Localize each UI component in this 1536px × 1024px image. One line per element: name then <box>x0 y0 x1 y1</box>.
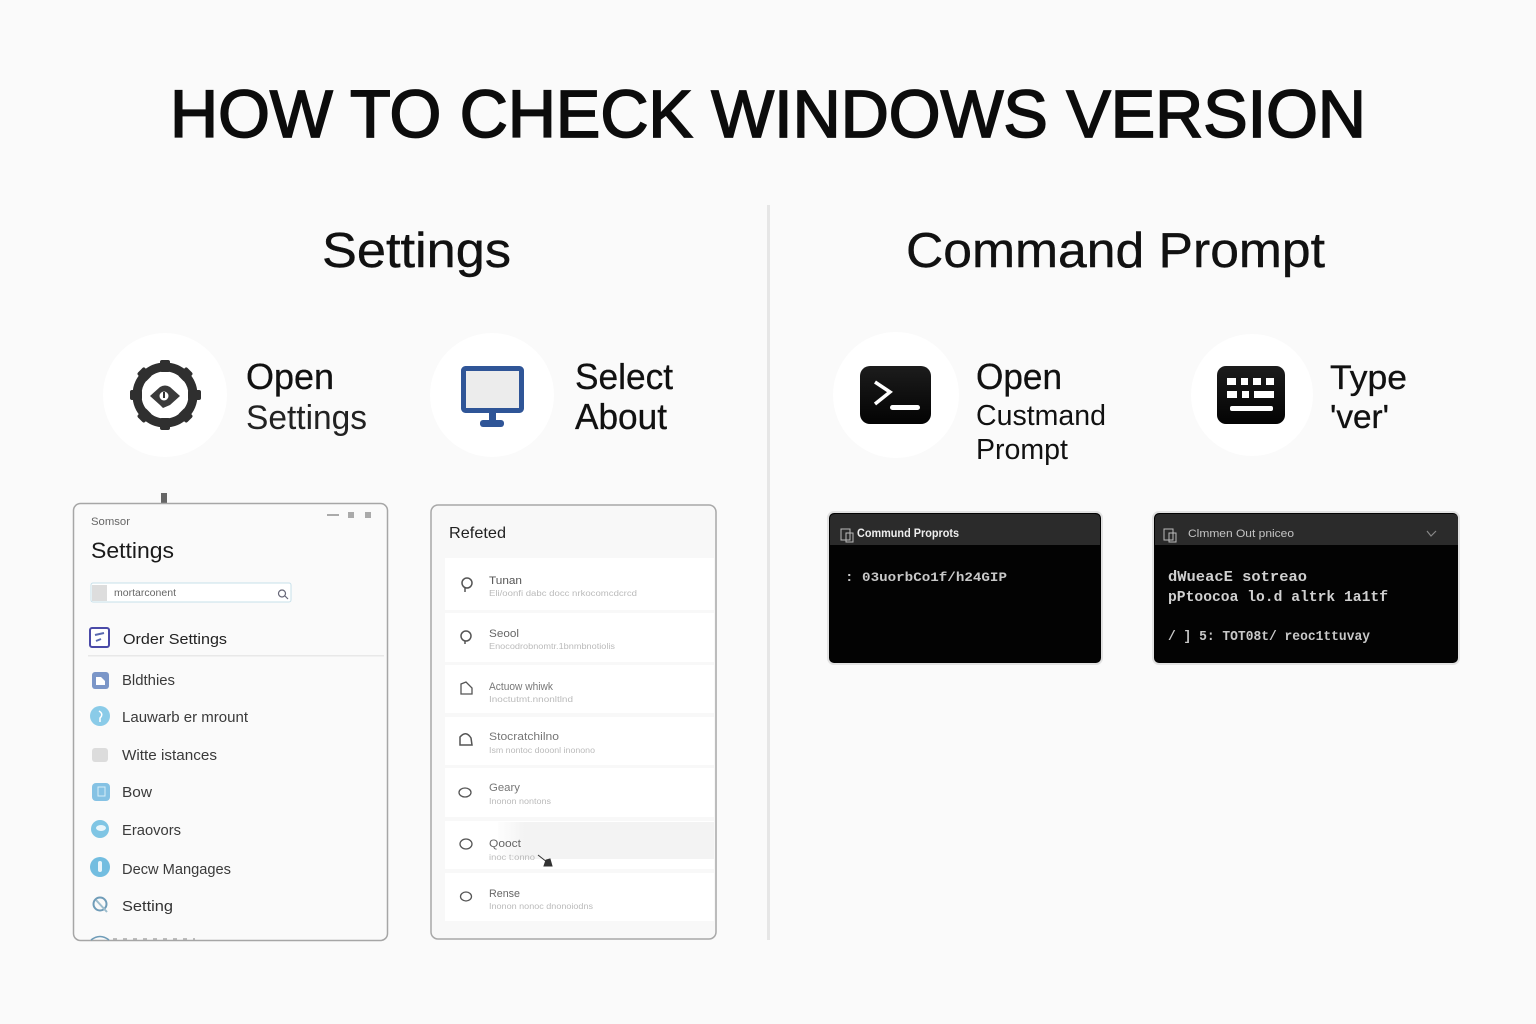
panel heading: Refeted <box>449 525 506 542</box>
row: Geary: Geary <box>489 782 521 794</box>
step: Type ver <box>1191 334 1407 456</box>
terminal: command output window: pPtoocoa lo.d altrk 1a1tf <box>1168 589 1388 606</box>
label: Open Settings: Settings <box>246 399 367 437</box>
settings menu list: Witte istances <box>122 748 217 764</box>
settings menu list: Order Settings <box>123 631 227 648</box>
row: Qooct: inoc t:onno <box>489 853 536 862</box>
row: Seool: Enocodrobnomtr.1bnmbnotiolis <box>489 642 615 651</box>
settings menu list: Bow <box>122 785 153 801</box>
row: Geary <box>445 768 714 817</box>
terminal: command prompt window <box>828 512 1102 664</box>
label: Select About: About <box>575 396 667 437</box>
icon: monitor <box>464 368 522 427</box>
row: Actuow <box>445 665 714 713</box>
row: Tunan: Eli/oonfi dabc docc nrkocomcdcrcd <box>489 589 637 598</box>
panel: settings window <box>74 493 388 940</box>
icon: keyboard <box>1217 366 1285 424</box>
label: Select About: Select <box>575 356 673 397</box>
label: Type ver: 'ver' <box>1330 398 1389 435</box>
row: Tunan: Tunan <box>489 575 522 587</box>
step: Open Settings <box>103 333 367 457</box>
settings menu list: Eraovors <box>122 823 181 839</box>
settings heading: Settings <box>91 538 174 563</box>
label: Type ver: Type <box>1330 359 1407 397</box>
label: Open Custmand Prompt: Open <box>976 356 1062 397</box>
row: Qooct <box>445 821 714 869</box>
step: Select About <box>430 333 673 457</box>
step: Open Command Prompt <box>833 332 1106 466</box>
row: Rense <box>445 873 714 921</box>
window controls <box>327 512 371 518</box>
row: Rense: Rense <box>489 888 520 900</box>
terminal: command output window: Clmmen Out pniceo <box>1188 528 1294 540</box>
search box: mortarconent <box>114 588 176 599</box>
panel: about window <box>431 505 716 939</box>
terminal: command prompt window: : 03uorbCo1f/h24GIP <box>845 570 1007 585</box>
heading: Settings: Settings <box>322 224 511 278</box>
label: Open Custmand Prompt: Custmand <box>976 400 1106 432</box>
icon: gear <box>130 360 201 430</box>
terminal: command prompt window: Commund Proprots <box>857 528 959 540</box>
row: Seool: Seool <box>489 628 519 640</box>
settings menu list <box>88 628 384 940</box>
icon: cursor <box>538 855 552 866</box>
row: Actuow: Inoctutmt.nnonltlnd <box>489 695 573 704</box>
settings menu list: Lauwarb er mrount <box>122 710 248 726</box>
label: Type ver <box>1330 359 1407 435</box>
settings menu list: Bldthies <box>122 673 175 689</box>
row: Seool <box>445 613 714 662</box>
icon: terminal <box>860 366 931 424</box>
terminal: command output window <box>1153 512 1459 664</box>
label: Open Custmand Prompt: Prompt <box>976 434 1068 466</box>
label: Open Custmand Prompt <box>976 356 1106 466</box>
search box <box>91 583 291 602</box>
heading: Command Prompt: Command Prompt <box>906 224 1325 278</box>
row: Actuow: Actuow whiwk <box>489 681 553 693</box>
terminal: command output window: dWueacE sotreao <box>1168 569 1307 586</box>
terminal: command output window: / ] 5: TOT08t/ reoc1ttuvay <box>1168 629 1371 645</box>
row: Stocratchilno <box>445 717 714 765</box>
row: Qooct: Qooct <box>489 838 521 850</box>
row: Tunan <box>445 558 714 610</box>
title: HOW TO CHECK WINDOWS VERSION <box>170 77 1366 152</box>
settings menu list: Decw Mangages <box>122 862 231 878</box>
panel: settings window: Somsor <box>91 516 130 528</box>
label: Open Settings <box>246 356 367 437</box>
label: Select About <box>575 356 673 437</box>
settings menu list: Setting <box>122 899 173 915</box>
row: Stocratchilno: Ism nontoc dooonl inonono <box>489 746 596 755</box>
row: Geary: Inonon nontons <box>489 797 551 806</box>
row: Stocratchilno: Stocratchilno <box>489 731 559 743</box>
row: Rense: Inonon nonoc dnonoiodns <box>489 902 593 911</box>
label: Open Settings: Open <box>246 356 334 397</box>
